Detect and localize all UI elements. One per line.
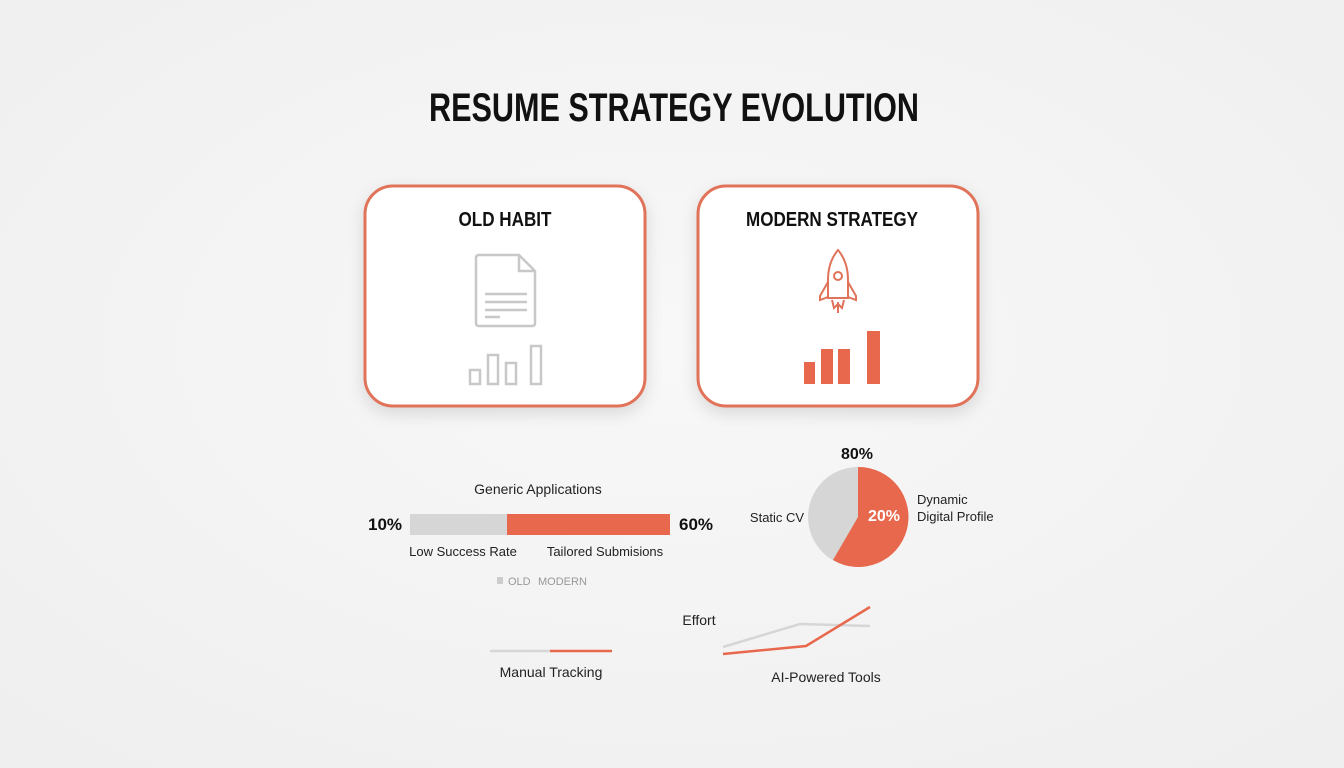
panel: modern strategy <box>698 186 978 406</box>
chart: success rate bar: 10% <box>368 515 402 534</box>
chart: effort line <box>682 607 881 685</box>
chart: pie: 20% <box>868 508 900 525</box>
legend <box>497 576 587 588</box>
title: RESUME STRATEGY EVOLUTION <box>429 86 919 130</box>
icon: bar chart filled <box>804 331 880 384</box>
chart: manual tracking line <box>490 651 612 680</box>
chart: success rate bar: Generic Applications <box>474 481 602 497</box>
chart: pie: Static CV <box>750 510 804 525</box>
heading: modern strategy: MODERN STRATEGY <box>746 209 919 231</box>
icon: document <box>476 255 535 326</box>
chart: effort line: AI-Powered Tools <box>771 669 881 685</box>
chart: success rate bar: Tailored Submisions <box>547 544 664 559</box>
panel: old habit <box>365 186 645 406</box>
icon: rocket <box>820 250 856 313</box>
chart: success rate bar <box>368 481 713 588</box>
chart: pie: Dynamic <box>917 492 968 507</box>
heading: old habit: OLD HABIT <box>458 209 552 231</box>
chart: pie: 80% <box>841 446 873 463</box>
chart: manual tracking line: Manual Tracking <box>500 664 602 680</box>
chart: success rate bar: Low Success Rate <box>409 544 517 559</box>
legend: MODERN <box>538 576 587 588</box>
chart: success rate bar: 60% <box>679 515 713 534</box>
chart: pie: Digital Profile <box>917 509 994 524</box>
chart: effort line: Effort <box>682 612 716 628</box>
icon: bar chart outline <box>470 346 541 384</box>
chart: pie <box>750 446 994 567</box>
legend: OLD <box>508 576 531 588</box>
